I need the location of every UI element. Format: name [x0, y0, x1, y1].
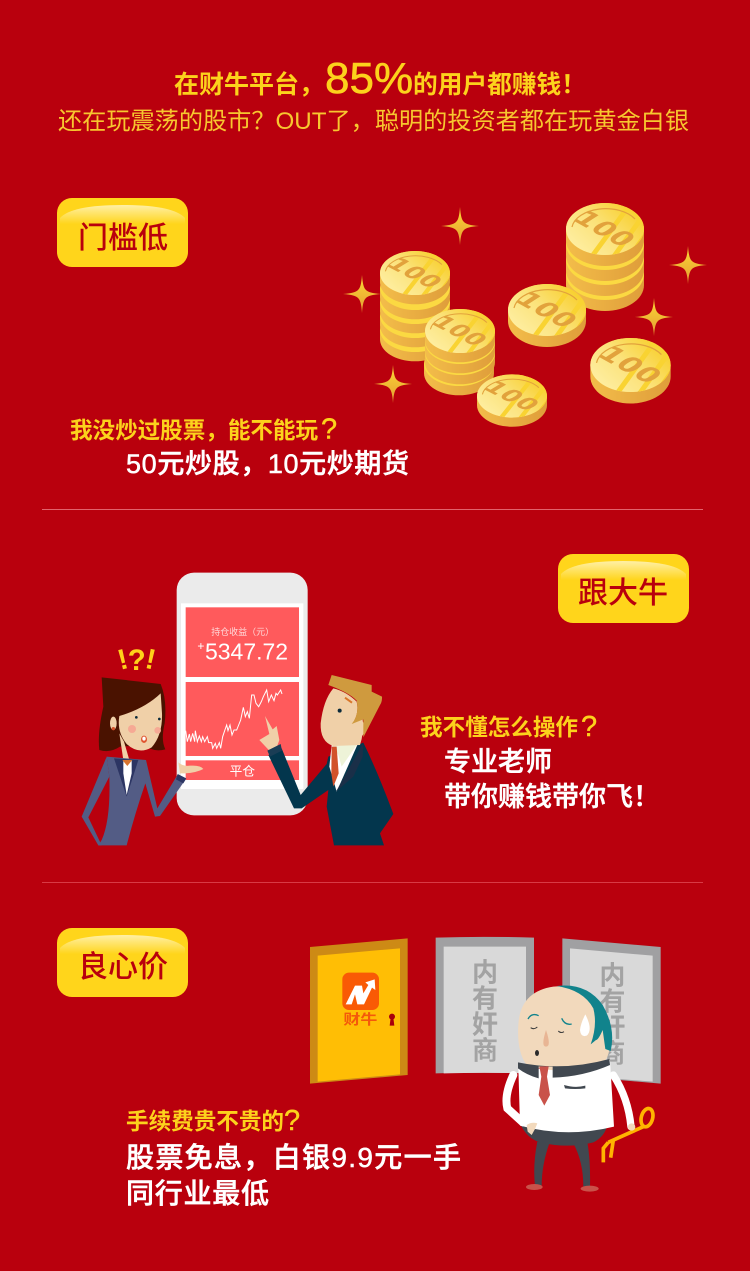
coin: single small: 100 — [477, 377, 547, 415]
badge: 门槛低: 门槛低 — [78, 222, 168, 255]
coin: single middle: 100 — [508, 288, 585, 333]
label: 财牛: 财牛 — [343, 1011, 377, 1027]
badge: 跟大牛: 跟大牛 — [578, 577, 668, 610]
question text: ? — [284, 1105, 300, 1137]
question text: ? — [581, 711, 597, 743]
question text: 手续费贵不贵的 — [126, 1108, 284, 1134]
door lettering: 奸 — [599, 1012, 625, 1042]
answer text: 股票免息，白银9.9元一手 — [126, 1142, 461, 1173]
icon: confused marks: ? — [128, 644, 146, 677]
businessman with key — [506, 985, 655, 1192]
icon: gold coins and sparkles — [343, 199, 707, 427]
woman advisor — [82, 677, 203, 845]
icon: confused marks: ! — [114, 643, 131, 677]
question text: 我不懂怎么操作 — [420, 714, 578, 740]
question text: 我没炒过股票，能不能玩 — [70, 417, 318, 443]
title line end: 的用户都赚钱！ — [413, 71, 586, 99]
door lettering: 奸 — [472, 1010, 498, 1040]
answer text — [444, 747, 660, 812]
coin: single right — [590, 334, 703, 403]
phone: + — [197, 639, 204, 653]
header — [58, 54, 689, 135]
subtitle: 还在玩震荡的股市？OUT了，聪明的投资者都在玩黄金白银 — [58, 108, 689, 135]
door lettering — [472, 958, 498, 1066]
title line: 在财牛平台， — [174, 70, 324, 99]
illustration: phone with two advisors — [82, 573, 393, 845]
coin: single right: 100 — [590, 342, 669, 389]
panel: follow the experts — [82, 554, 689, 845]
badge: 跟大牛 — [558, 554, 689, 623]
answer text: 专业老师 — [444, 747, 552, 777]
coin stack: front — [424, 306, 523, 395]
coin stack: back left: 100 — [380, 254, 450, 292]
coin stack: back right: 100 — [566, 207, 643, 252]
coin: single middle — [508, 280, 617, 347]
door lettering: 内 — [472, 958, 498, 988]
coin stack: back right — [566, 199, 675, 311]
85 percent figure: 85% — [325, 54, 413, 103]
label: holding profit: 持仓收益（元） — [211, 626, 274, 637]
badge: 门槛低 — [57, 198, 188, 267]
door lettering — [599, 960, 625, 1068]
badge: 良心价 — [57, 928, 188, 997]
coin: single small — [477, 371, 575, 427]
illustration: doors and businessman — [310, 937, 661, 1192]
icon: confused marks: ! — [143, 643, 159, 677]
door lettering: 有 — [599, 986, 625, 1016]
man advisor — [259, 675, 393, 845]
answer text: 同行业最低 — [126, 1178, 269, 1209]
door: right — [562, 938, 661, 1084]
panel: low threshold — [57, 198, 707, 479]
door: centre — [436, 937, 534, 1073]
door lettering: 有 — [472, 984, 498, 1014]
answer text — [126, 1142, 461, 1209]
badge: 良心价: 良心价 — [78, 951, 168, 984]
value: profit figure: 5347.72 — [205, 638, 288, 664]
icon: confused marks — [114, 643, 159, 677]
door lettering: 商 — [472, 1036, 498, 1066]
key — [603, 1107, 655, 1162]
line chart — [186, 690, 282, 748]
door lettering: 内 — [599, 960, 625, 990]
answer text: 50元炒股，10元炒期货 — [126, 449, 409, 479]
icon: app logo — [342, 973, 379, 1010]
answer text: 带你赚钱带你飞！ — [444, 782, 660, 812]
door: 财牛 — [310, 938, 408, 1084]
question text: ? — [321, 414, 337, 446]
label: close position: 平仓 — [230, 764, 255, 778]
door lettering: 商 — [599, 1038, 625, 1068]
coin stack: front: 100 — [425, 312, 495, 350]
coin stack: back left — [380, 248, 478, 361]
keyhole — [389, 1014, 395, 1026]
phone — [177, 573, 308, 815]
panel: fair price — [57, 928, 661, 1209]
